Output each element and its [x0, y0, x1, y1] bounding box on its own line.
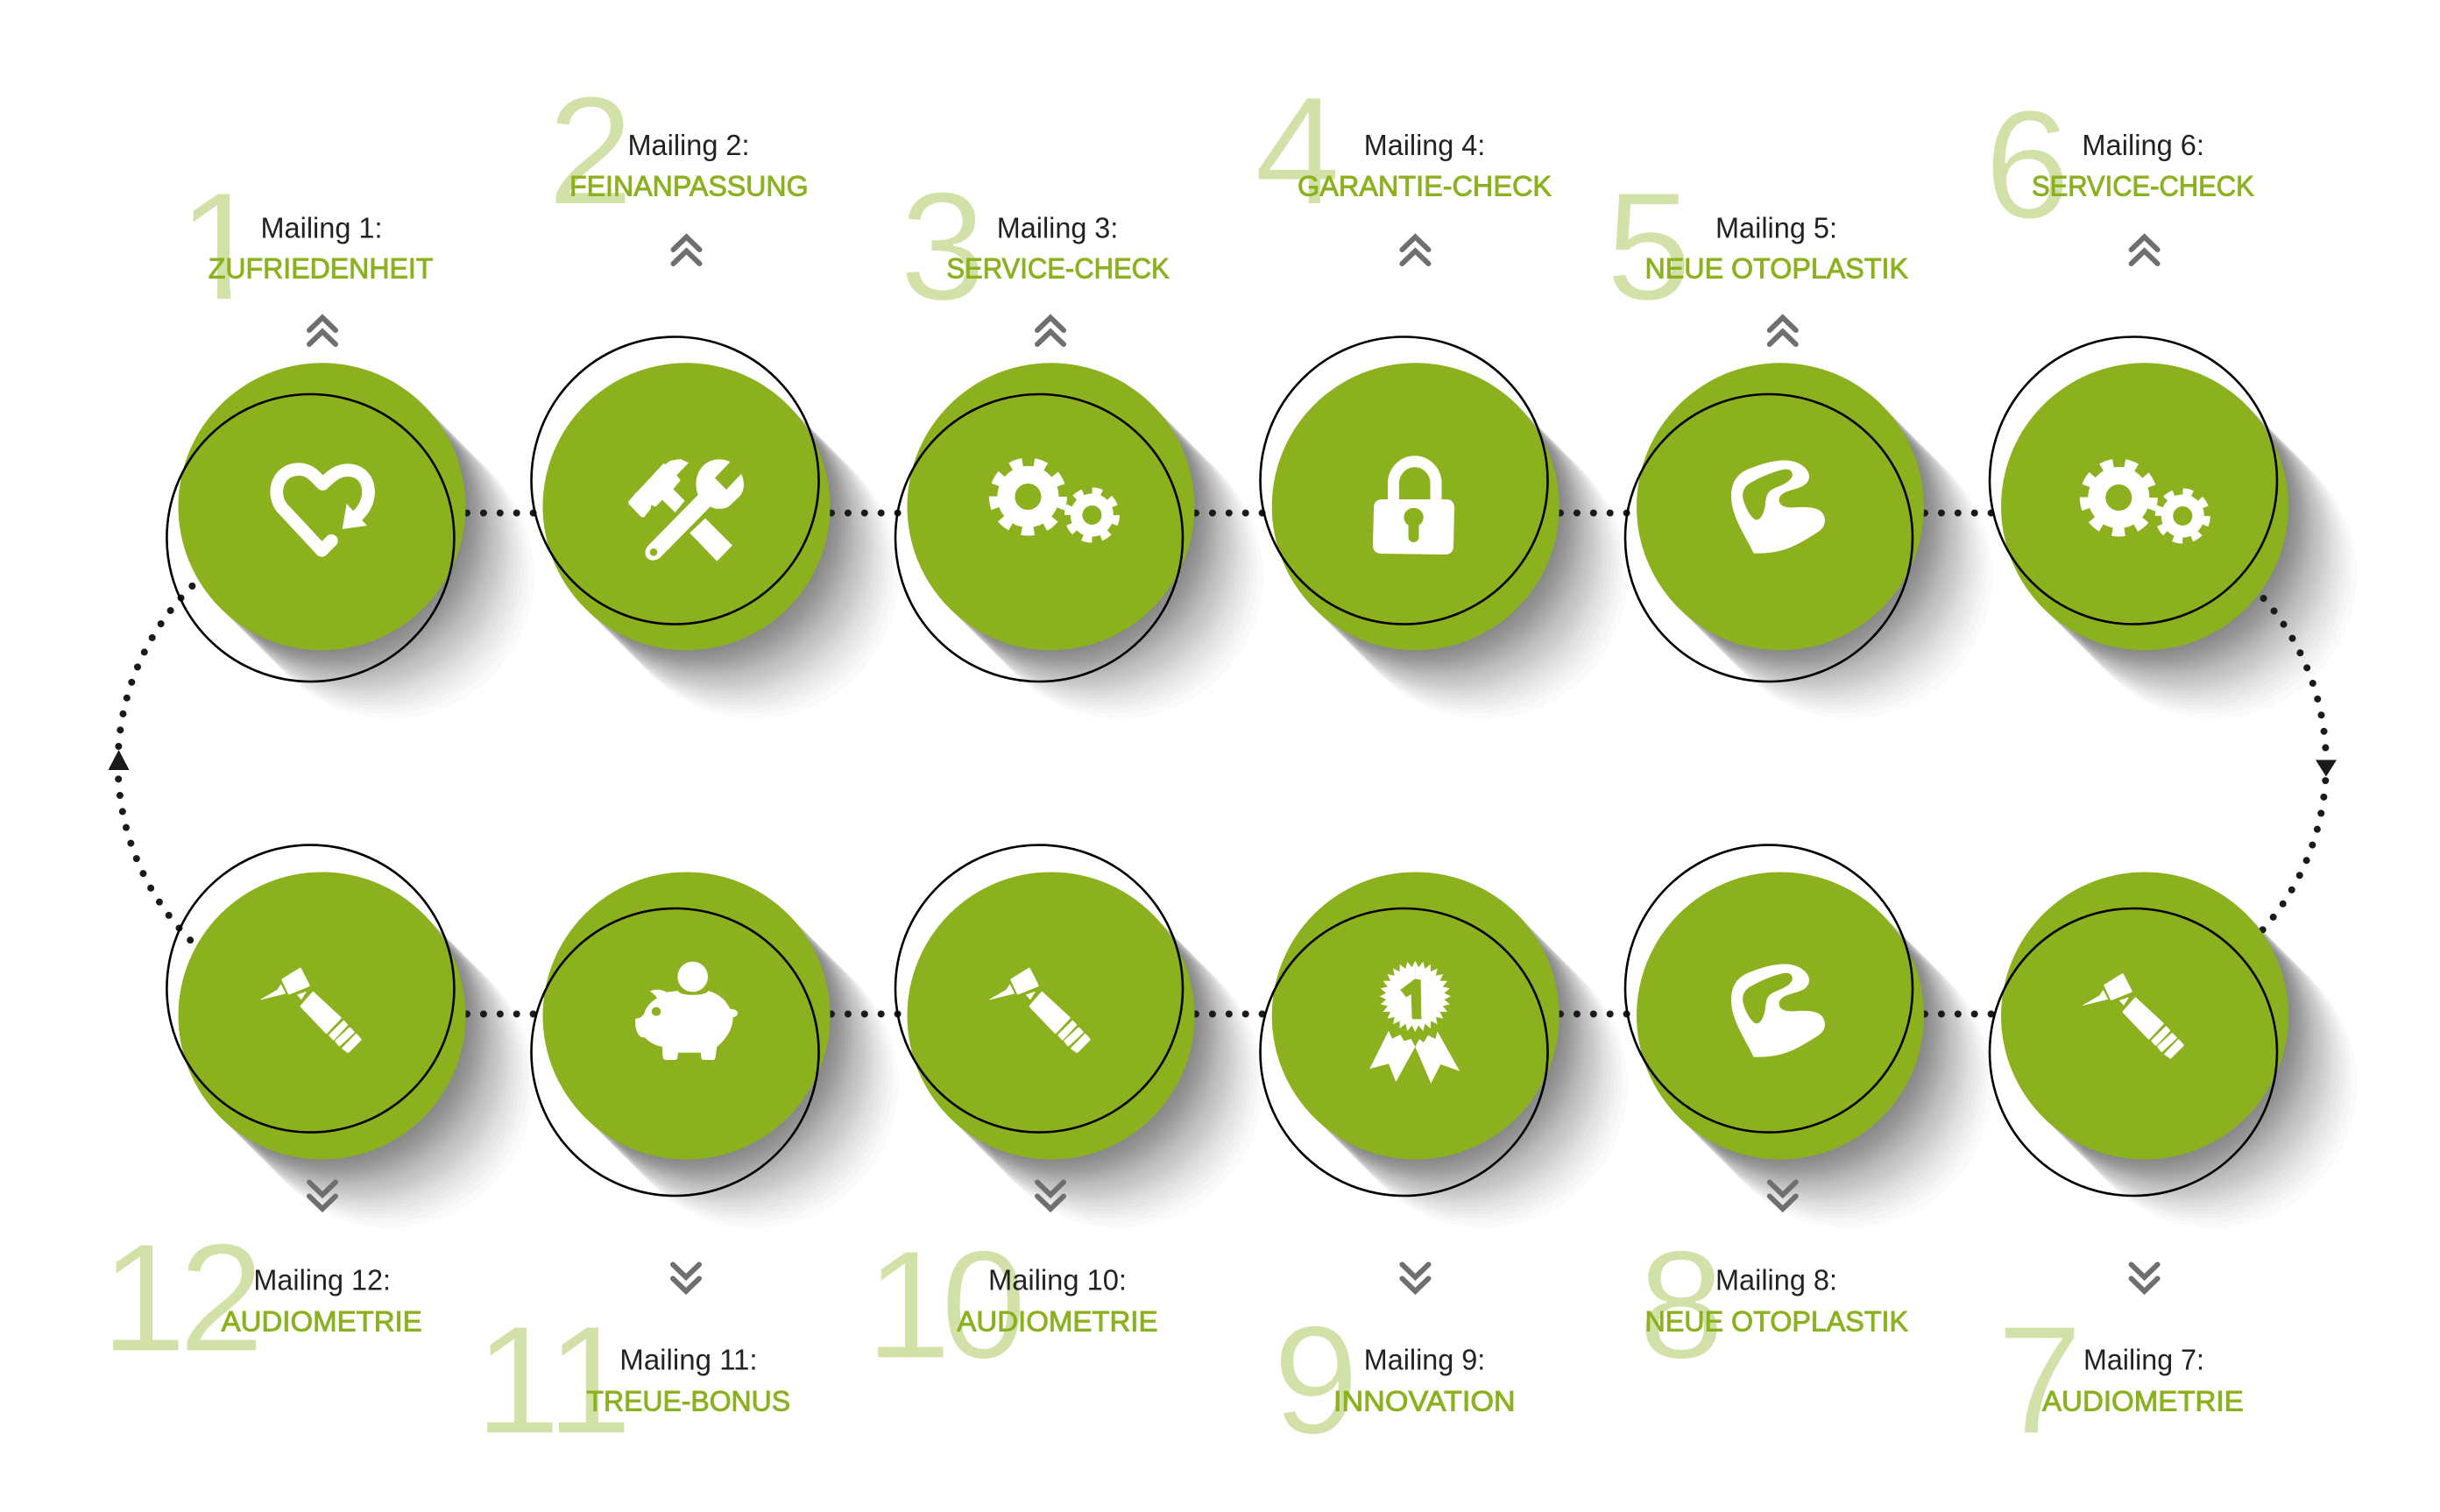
label: mailing 8: 8: [1638, 1219, 1724, 1391]
label: mailing 8: [1638, 1183, 1908, 1391]
arrow: right loop downward: [2316, 760, 2337, 776]
icon: award rosette: [1369, 961, 1460, 1084]
label: mailing 7: [1997, 1265, 2244, 1466]
label: mailing 12: Mailing 12:: [253, 1263, 391, 1297]
label: mailing 8: Mailing 8:: [1715, 1263, 1837, 1297]
black outline rings: [166, 336, 2277, 1196]
label: mailing 10: 10: [866, 1219, 1027, 1391]
label: mailing 6: Mailing 6:: [2082, 129, 2204, 161]
icon: otoscope (mailing 12): [261, 969, 360, 1052]
icon: gears (mailing 6): [2084, 463, 2207, 540]
label: mailing 4: [1255, 66, 1552, 264]
long shadows: [180, 364, 2357, 1228]
icon: otoplastic (mailing 5): [1731, 461, 1825, 554]
label: mailing 6: 6: [1984, 79, 2070, 251]
label: mailing 5: Mailing 5:: [1715, 212, 1837, 244]
icon: padlock: [1373, 462, 1454, 555]
label: mailing 7: 7: [1997, 1295, 2083, 1466]
green circles: [179, 363, 2288, 1160]
label: mailing 12: AUDIOMETRIE: [222, 1306, 422, 1338]
label: mailing 7: Mailing 7:: [2083, 1344, 2204, 1376]
label: mailing 1: [173, 161, 434, 344]
label: mailing 10: AUDIOMETRIE: [957, 1306, 1158, 1338]
label: mailing 3: [900, 161, 1170, 344]
label: mailing 4: Mailing 4:: [1364, 129, 1485, 161]
label: mailing 11: Mailing 11:: [619, 1344, 758, 1376]
label: mailing 3: Mailing 3:: [997, 212, 1118, 244]
label: mailing 3: SERVICE-CHECK: [946, 252, 1170, 284]
label: mailing 12: 12: [101, 1212, 265, 1384]
dotted connectors: [118, 513, 2326, 1014]
label: mailing 1: 1: [178, 161, 264, 333]
label: mailing 4: 4: [1255, 66, 1340, 237]
arrow: left loop upward: [109, 750, 130, 770]
label: mailing 7: AUDIOMETRIE: [2042, 1386, 2244, 1417]
label: mailing 5: [1606, 161, 1908, 344]
label: mailing 2: [548, 66, 809, 264]
label: mailing 11: 11: [475, 1295, 633, 1466]
label: mailing 11: [475, 1265, 790, 1466]
label: mailing 2: 2: [548, 66, 633, 237]
label: mailing 2: FEINANPASSUNG: [569, 170, 809, 201]
label: mailing 3: 3: [900, 161, 986, 333]
label: mailing 9: INNOVATION: [1333, 1386, 1516, 1417]
label: mailing 1: ZUFRIEDENHEIT: [209, 252, 434, 284]
label: mailing 5: 5: [1606, 161, 1692, 333]
label: mailing 10: Mailing 10:: [988, 1263, 1127, 1297]
label: mailing 6: SERVICE-CHECK: [2032, 170, 2254, 201]
icon: otoplastic (mailing 8): [1731, 964, 1825, 1057]
label: mailing 6: [1984, 79, 2254, 264]
icon: gears (mailing 3): [994, 463, 1116, 540]
icon: piggy bank: [635, 962, 738, 1060]
icon: otoscope (mailing 7): [2083, 974, 2182, 1057]
label: mailing 9: [1273, 1265, 1516, 1466]
label: mailing 11: TREUE-BONUS: [587, 1386, 790, 1417]
label: mailing 5: NEUE OTOPLASTIK: [1645, 252, 1908, 284]
label: mailing 12: [101, 1183, 422, 1384]
icon: heart with arrow: [277, 470, 369, 550]
icon: otoscope (mailing 10): [990, 969, 1089, 1052]
label: mailing 9: Mailing 9:: [1364, 1344, 1485, 1376]
label: mailing 9: 9: [1273, 1295, 1359, 1466]
label: mailing 1: Mailing 1:: [261, 212, 382, 244]
icon: hammer and wrench: [628, 459, 744, 562]
label: mailing 4: GARANTIE-CHECK: [1298, 170, 1552, 201]
label: mailing 10: [866, 1183, 1158, 1391]
label: mailing 2: Mailing 2:: [627, 129, 750, 161]
label: mailing 8: NEUE OTOPLASTIK: [1645, 1306, 1908, 1338]
